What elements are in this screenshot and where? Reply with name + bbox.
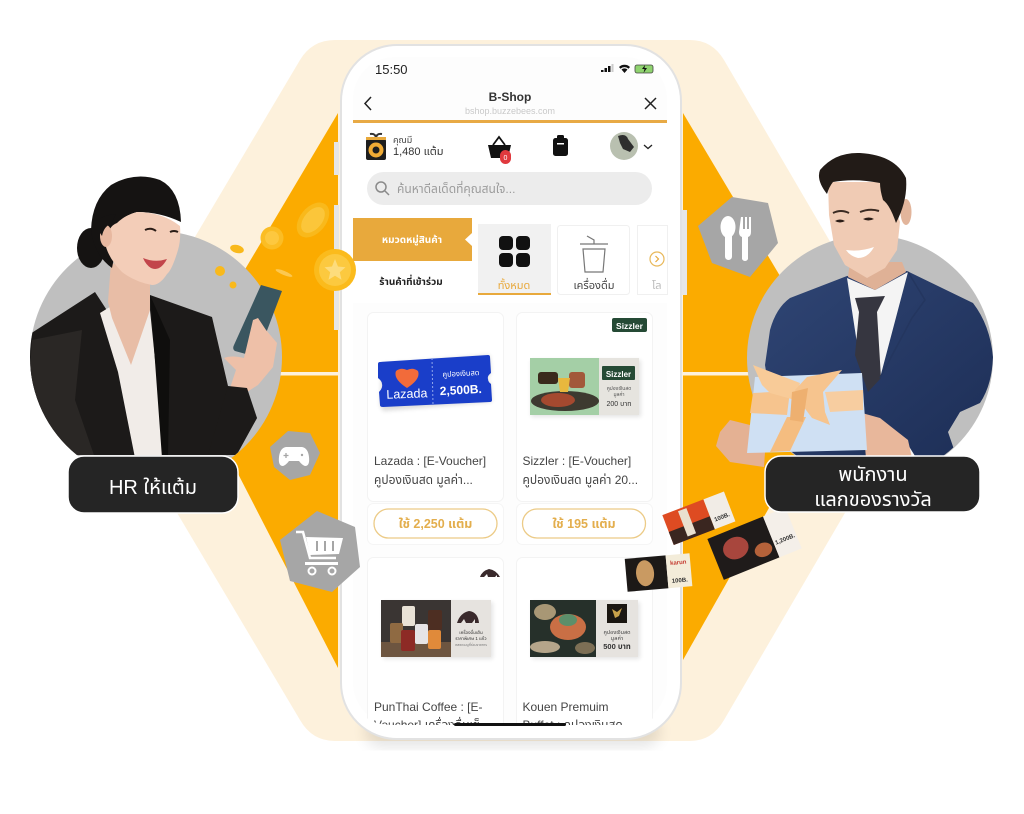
logo: PunThai elephant: [480, 569, 500, 577]
voucher: Sizzler: คูปองเงินสด: [607, 386, 631, 392]
shirt cuff: [910, 447, 915, 456]
icon: basket: [488, 137, 511, 164]
voucher: Kouen: [530, 600, 640, 659]
card: PunThai Coffee: [367, 557, 504, 725]
card: Lazada: [368, 312, 504, 544]
man right hand: [862, 413, 912, 458]
label: HR: [68, 456, 238, 513]
coins: [215, 196, 356, 291]
lapel line: [880, 272, 925, 378]
label: employee: [765, 456, 980, 512]
category: next: [638, 226, 668, 294]
shirt: [847, 272, 908, 378]
card subtitle: คูปองเงินสด มูลค่า 20...: [522, 473, 638, 487]
phone in hand: [233, 285, 282, 357]
tie: [855, 296, 885, 392]
face: [828, 182, 900, 278]
voucher: karun: [625, 553, 692, 592]
hand: [224, 318, 277, 392]
man figure: [765, 271, 993, 458]
category tab partner stores: ร้านค้าที่เข้าร่วม: [379, 274, 443, 288]
button: redeem: ใช้ 195 แต้ม: [552, 517, 616, 531]
neck: [108, 262, 150, 365]
voucher: PunThai: ตลอดเมนูที่ร่วมรายการ: [455, 642, 487, 647]
voucher: Kouen: มูลค่า: [611, 635, 623, 642]
category: drinks: เครื่องดื่ม: [573, 277, 615, 292]
coin medium: [260, 226, 284, 250]
woman figure: [25, 292, 257, 458]
suit jacket: [765, 271, 993, 458]
voucher: PunThai: เครื่องดื่มเย็น: [459, 629, 483, 635]
blazer shading: [28, 330, 95, 458]
background cream hexagon: [109, 40, 912, 741]
shirt: [100, 305, 165, 458]
voucher: karun: 100B.: [672, 577, 688, 585]
category tab active: [353, 218, 472, 261]
sleeve: [208, 386, 257, 455]
mouth: [143, 258, 167, 269]
card subtitle: Voucher] เครื่องดื่มเย็...: [374, 716, 490, 732]
icon: cutlery hexagon: [698, 197, 778, 277]
coin small: [215, 266, 225, 276]
hair bun: [77, 228, 105, 268]
icon: cart hexagon: [280, 511, 360, 592]
voucher: coffee red: 100B.: [714, 512, 731, 524]
hair: [819, 153, 906, 223]
lower product cards clipped by screen: [367, 557, 653, 725]
redeem card strip: [368, 504, 504, 544]
grey circle left: [30, 231, 282, 483]
label: employee: พนักงาน: [838, 464, 908, 486]
voucher: PunThai: [381, 600, 493, 659]
voucher: PunThai: ราคาพิเศษ 1 แก้ว: [455, 635, 487, 641]
points balance: 1,480 แต้ม: [393, 146, 443, 158]
neck: [848, 262, 906, 290]
search bar: ค้นหาดีลเด็ดที่คุณสนใจ...: [397, 180, 515, 196]
icon: clipboard: [553, 135, 568, 156]
home indicator: [454, 723, 566, 726]
logo: Sizzler: [612, 318, 647, 332]
vouchers floating: [625, 492, 802, 592]
category: all: ทั้งหมด: [498, 278, 530, 292]
card subtitle: Buffet : คูปองเงินสด: [522, 718, 623, 732]
orange hexagon left: [200, 113, 338, 668]
grey circle right: [747, 235, 993, 481]
category: next: โล: [652, 280, 662, 292]
button: redeem: [374, 509, 497, 538]
button: redeem: ใช้ 2,250 แต้ม: [399, 517, 472, 531]
voucher: Lazada: [378, 355, 492, 411]
card: Kouen Premium: [516, 557, 653, 725]
hair over ear: [95, 214, 116, 236]
ear: [100, 225, 112, 247]
coin edge: [275, 268, 293, 278]
voucher: Sizzler: 200 บาท: [607, 401, 631, 408]
voucher: coffee red: [662, 492, 735, 545]
card subtitle: คูปองเงินสด มูลค่า...: [374, 473, 473, 487]
icon: gift points: [366, 134, 386, 160]
card title: Lazada : [E-Voucher]: [374, 454, 486, 468]
search bar: [367, 172, 652, 205]
ear: [900, 199, 912, 225]
voucher: steak: [707, 508, 802, 580]
eyes: [145, 229, 178, 232]
voucher: Lazada: 2,500B.: [439, 382, 482, 398]
blazer lapel right: [150, 295, 170, 458]
phone screen: [353, 57, 667, 725]
gift box: [747, 373, 867, 453]
voucher: Sizzler: มูลค่า: [613, 391, 625, 398]
voucher: Sizzler: [530, 358, 641, 417]
voucher: Sizzler: Sizzler: [606, 370, 631, 379]
white connector line right: [683, 372, 753, 376]
status bar: [375, 62, 653, 77]
status bar: 15:50: [375, 62, 408, 77]
voucher: Kouen: 500 บาท: [603, 642, 631, 651]
label: employee: แลกของรางวัล: [814, 489, 932, 511]
coin tiny: [230, 282, 236, 288]
voucher: karun: karun: [670, 560, 687, 567]
coin tilted: [290, 196, 336, 244]
button: redeem: [522, 509, 646, 538]
phone shadow: [365, 715, 660, 747]
card title: Sizzler : [E-Voucher]: [522, 454, 631, 468]
card: Sizzler: [516, 312, 652, 544]
coin large: [314, 249, 356, 291]
category tab active: หมวดหมู่สินค้า: [382, 233, 442, 246]
orange hexagon right: [683, 113, 830, 660]
eyes: [833, 210, 879, 213]
voucher: Kouen: คูปองเงินสด: [603, 630, 631, 636]
hair: [91, 176, 181, 268]
left person: HR woman: [25, 176, 282, 483]
card title: Kouen Premuim: [522, 700, 609, 714]
phone mockup: [334, 45, 687, 748]
card title: PunThai Coffee : [E-: [374, 700, 483, 714]
right person: employee man: [716, 153, 993, 481]
smile: [846, 247, 874, 258]
label: HR: HR ให้แต้ม: [109, 476, 197, 499]
blazer: [25, 292, 257, 458]
voucher: Lazada: คูปองเงินสด: [442, 368, 480, 379]
category: all: [478, 224, 551, 295]
points balance: คุณมี: [393, 135, 412, 145]
phone body: [341, 45, 681, 739]
points balance: [366, 134, 443, 160]
voucher: Lazada: Lazada: [386, 386, 428, 402]
logo: Sizzler: Sizzler: [616, 321, 644, 331]
header white band: [353, 123, 667, 218]
side buttons: [334, 142, 687, 330]
voucher: steak: 1,200B.: [774, 533, 797, 547]
face: [105, 212, 180, 285]
white connector line left: [275, 372, 339, 376]
browser header: [353, 90, 667, 123]
redeem card strip: [516, 504, 652, 544]
gift ribbon: [750, 365, 863, 452]
icon: gamepad hexagon: [270, 431, 320, 480]
category: drinks: [558, 226, 630, 294]
browser header: B-Shop: [489, 90, 531, 104]
man left hand: [716, 420, 765, 467]
coin small tilted: [229, 243, 245, 255]
browser header: bshop.buzzebees.com: [465, 106, 555, 116]
icon: basket: 0: [504, 155, 508, 162]
category band: [353, 218, 667, 303]
avatar: [610, 132, 652, 160]
